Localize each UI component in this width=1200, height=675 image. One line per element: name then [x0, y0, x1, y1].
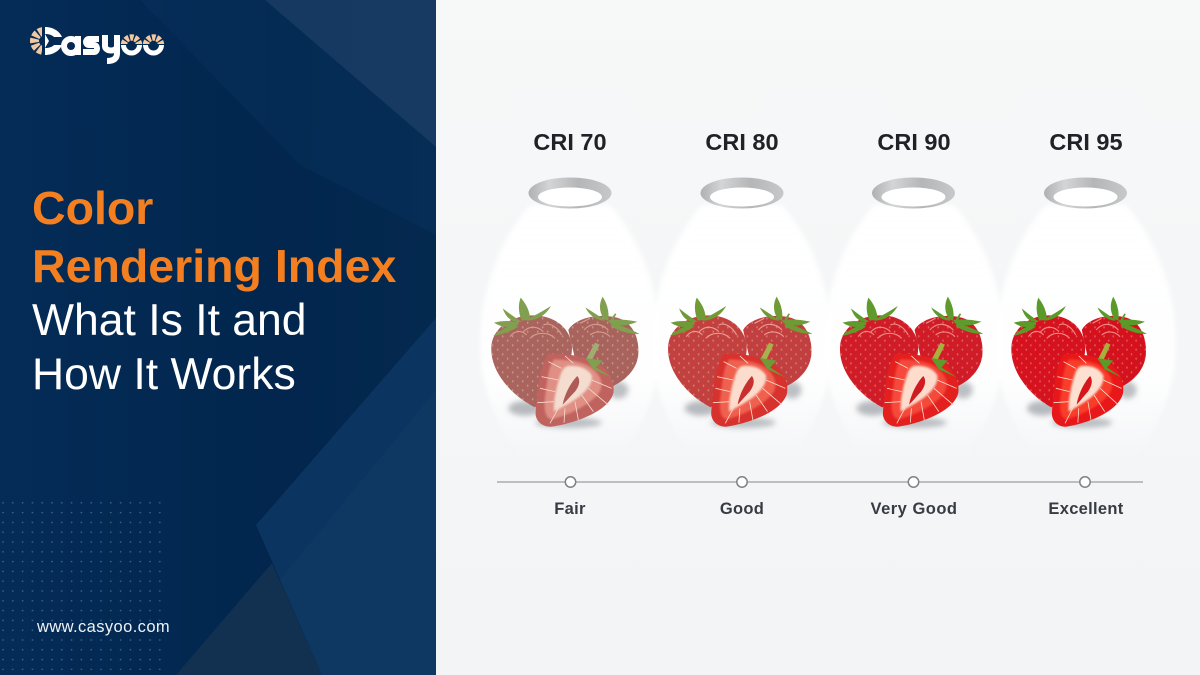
website url: www.casyoo.com	[37, 618, 170, 636]
title	[32, 182, 396, 399]
title: What Is It and	[32, 296, 307, 345]
icon: casyoo logo	[30, 27, 164, 64]
title: How It Works	[32, 350, 296, 399]
heading: CRI 80: CRI 80	[705, 129, 779, 155]
heading: CRI 70: CRI 70	[533, 129, 607, 155]
title: Color	[32, 182, 153, 234]
label: Good: Good	[720, 500, 764, 518]
title: Rendering Index	[32, 240, 396, 292]
heading: CRI 90: CRI 90	[877, 129, 951, 155]
label: Very Good: Very Good	[870, 500, 958, 518]
label: Excellent: Excellent	[1048, 500, 1124, 518]
chart: CRI rating scale line	[497, 476, 1143, 488]
heading: CRI 95: CRI 95	[1049, 129, 1123, 155]
label: Fair: Fair	[554, 500, 586, 518]
